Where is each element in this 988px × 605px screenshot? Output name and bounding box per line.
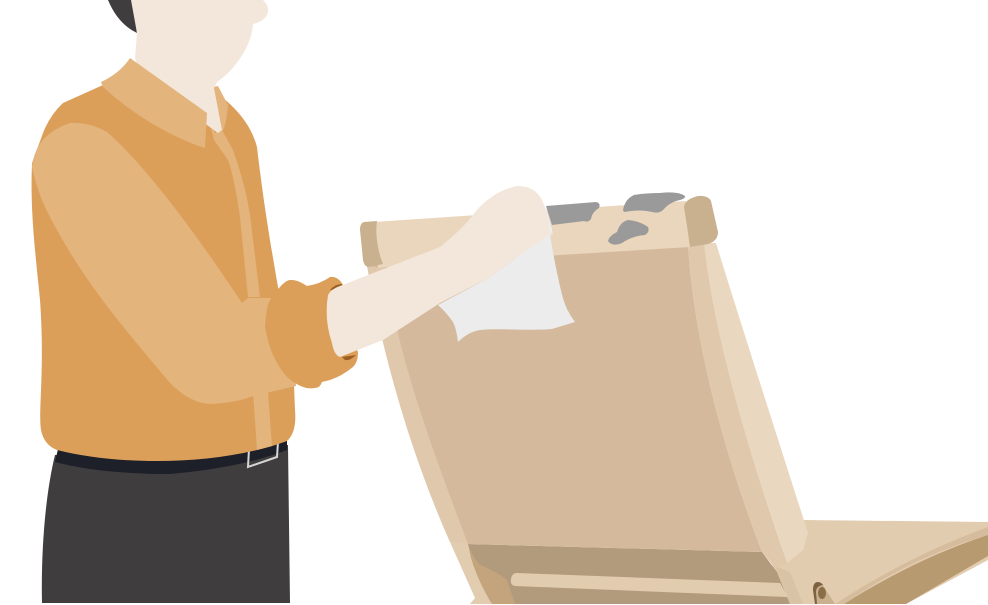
chair back left strip bbox=[367, 266, 468, 544]
chair left leg bbox=[450, 542, 492, 604]
belt buckle bbox=[248, 442, 278, 467]
chair bbox=[360, 192, 988, 604]
chair top band bbox=[374, 201, 690, 268]
shirt body bbox=[32, 85, 295, 461]
shirt right collar bbox=[213, 86, 228, 133]
chair back right strip bbox=[688, 243, 787, 568]
stains bbox=[546, 192, 685, 245]
cloth bbox=[438, 206, 575, 342]
shirt collar bbox=[101, 58, 207, 148]
chair right cap bbox=[684, 196, 718, 247]
forearm and hand bbox=[327, 186, 553, 357]
cuff inner shadow bbox=[330, 284, 356, 360]
person bbox=[32, 0, 575, 603]
cuff bbox=[265, 277, 358, 388]
neck and head bbox=[131, 0, 268, 133]
chair left cap bbox=[360, 221, 383, 267]
chair lower back shadow bbox=[468, 544, 790, 604]
chair right leg bbox=[775, 566, 803, 604]
hair bbox=[108, 0, 137, 33]
shirt placket bbox=[207, 113, 260, 297]
chair left leg wedge bbox=[468, 544, 515, 604]
chair back panel bbox=[367, 245, 762, 552]
trousers bbox=[42, 445, 290, 603]
sleeve bbox=[32, 123, 296, 404]
chair seat bbox=[770, 520, 988, 604]
belt bbox=[55, 438, 287, 474]
chair rail bbox=[511, 573, 788, 597]
chair pivot bbox=[813, 582, 835, 604]
